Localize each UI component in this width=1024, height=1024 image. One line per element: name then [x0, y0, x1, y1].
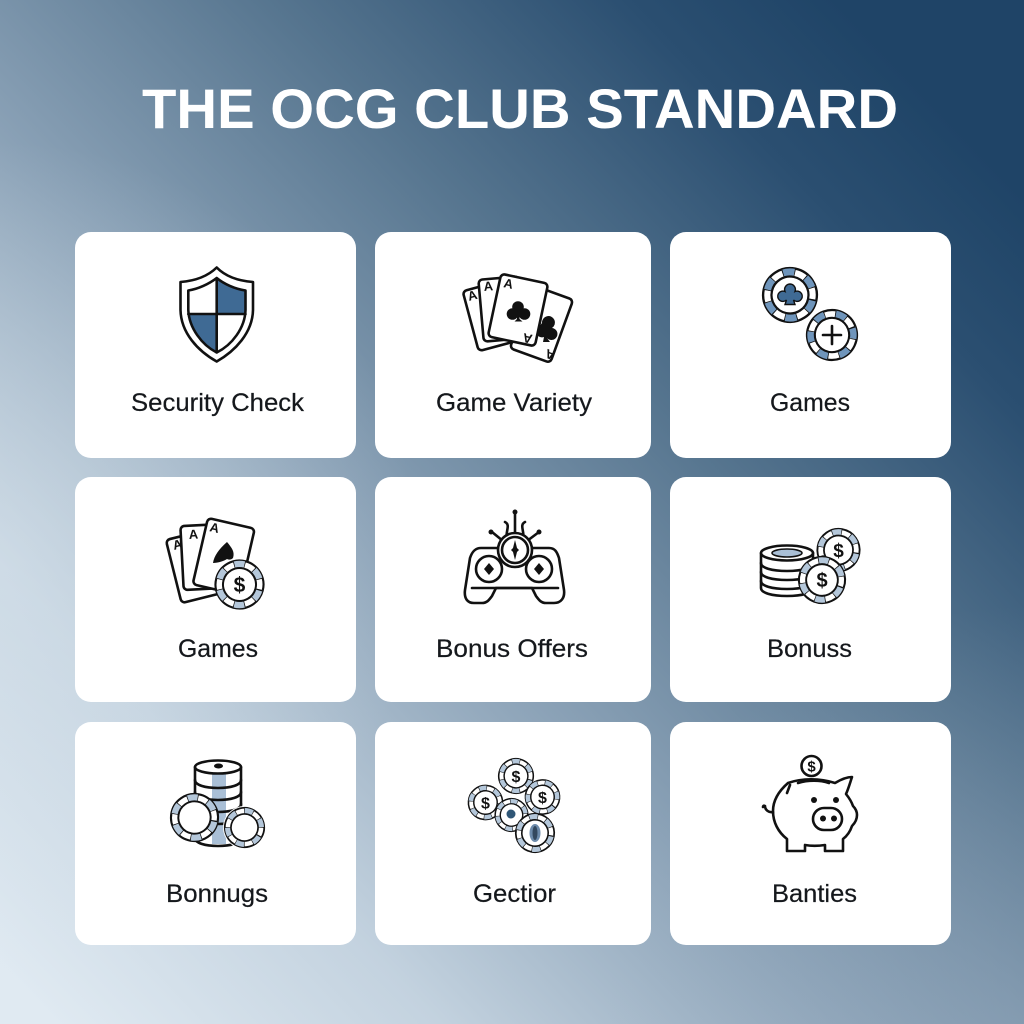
icon: game controller	[465, 510, 564, 603]
icon: scattered chips: $	[538, 790, 547, 807]
panel: security check	[75, 232, 356, 458]
icon: chip stack with coins: $	[816, 570, 828, 592]
icon: cards with chip: A	[208, 519, 221, 536]
icon: cards with chip: A	[188, 526, 199, 542]
icon: scattered chips	[467, 755, 567, 855]
label: Games	[770, 389, 850, 417]
icon: tall chip stack	[167, 760, 271, 854]
label: Security Check	[131, 389, 305, 417]
panel: bonuss	[670, 477, 951, 702]
icon: playing cards	[463, 274, 573, 363]
panel: gectior	[375, 722, 651, 945]
panel: banties	[670, 722, 951, 945]
label: Bonnugs	[166, 880, 268, 908]
icon: cards with chip: A	[171, 536, 184, 553]
icon: poker chips	[758, 263, 864, 367]
panel: games cards and chip	[75, 477, 356, 702]
label: Games	[178, 635, 258, 663]
label: Banties	[772, 880, 857, 908]
title: THE OCG CLUB STANDARD	[142, 77, 898, 140]
icon: playing cards: A	[502, 275, 515, 292]
panel: game variety	[375, 232, 651, 458]
icon: shield	[180, 268, 253, 362]
club	[507, 301, 530, 322]
label: Bonuss	[767, 635, 852, 663]
label: Gectior	[473, 880, 556, 908]
icon: scattered chips: $	[512, 769, 521, 786]
icon: cards with chip	[166, 518, 269, 614]
icon: cards with chip: $	[234, 574, 246, 597]
icon: playing cards: A	[466, 287, 479, 304]
icon: chip stack with coins	[761, 526, 863, 610]
icon: playing cards: A	[542, 346, 557, 363]
icon: playing cards: A	[521, 330, 534, 347]
panel: bonus offers	[375, 477, 651, 702]
label: Bonus Offers	[436, 635, 588, 663]
icon: piggy bank	[763, 756, 857, 851]
label: Game Variety	[436, 389, 593, 417]
icon: playing cards: A	[483, 278, 494, 294]
icon: scattered chips: $	[481, 796, 490, 812]
icon: piggy bank: $	[807, 758, 816, 776]
icon: chip stack with coins: $	[833, 541, 844, 562]
panel: bonnugs	[75, 722, 356, 945]
panel: games chips	[670, 232, 951, 458]
